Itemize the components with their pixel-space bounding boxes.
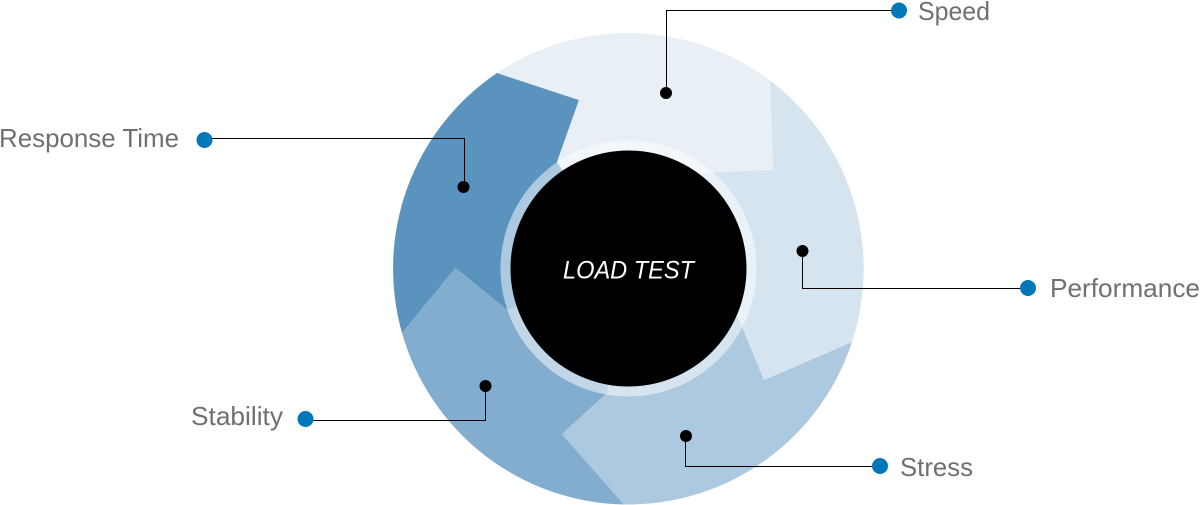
callout: stability <box>191 380 492 431</box>
callout: stress <box>680 430 973 482</box>
marker: speed <box>891 2 907 18</box>
leader line: response time <box>204 138 464 187</box>
panel: segmented ring <box>393 33 864 505</box>
label: stability: Stability <box>191 401 283 431</box>
segment: stability <box>402 268 628 504</box>
anchor dot: speed <box>660 87 672 99</box>
anchor dot: response time <box>458 181 470 193</box>
leader line: speed <box>666 10 899 93</box>
label: stress: Stress <box>900 452 973 482</box>
anchor dot: stability <box>480 380 492 392</box>
anchor dot: stress <box>680 430 692 442</box>
segment: stress <box>562 268 852 505</box>
segment: performance <box>628 80 864 380</box>
callout: response time <box>0 123 470 193</box>
marker: response time <box>196 132 212 148</box>
callout: performance <box>796 245 1200 303</box>
label: response time: Response Time <box>0 123 179 153</box>
leader line: performance <box>802 251 1028 288</box>
label: performance: Performance <box>1050 273 1200 303</box>
anchor dot: performance <box>796 245 808 257</box>
segment: response time <box>393 73 628 333</box>
marker: stress <box>872 458 888 474</box>
marker: performance <box>1020 280 1036 296</box>
centre label: LOAD TEST <box>563 256 696 284</box>
marker: stability <box>298 411 314 427</box>
leader line: stability <box>305 386 486 420</box>
segment: speed <box>497 33 773 268</box>
callout: speed <box>660 0 990 99</box>
leader line: stress <box>686 436 880 466</box>
centre circle: load test <box>510 150 746 386</box>
translucent inner ring <box>506 146 752 392</box>
